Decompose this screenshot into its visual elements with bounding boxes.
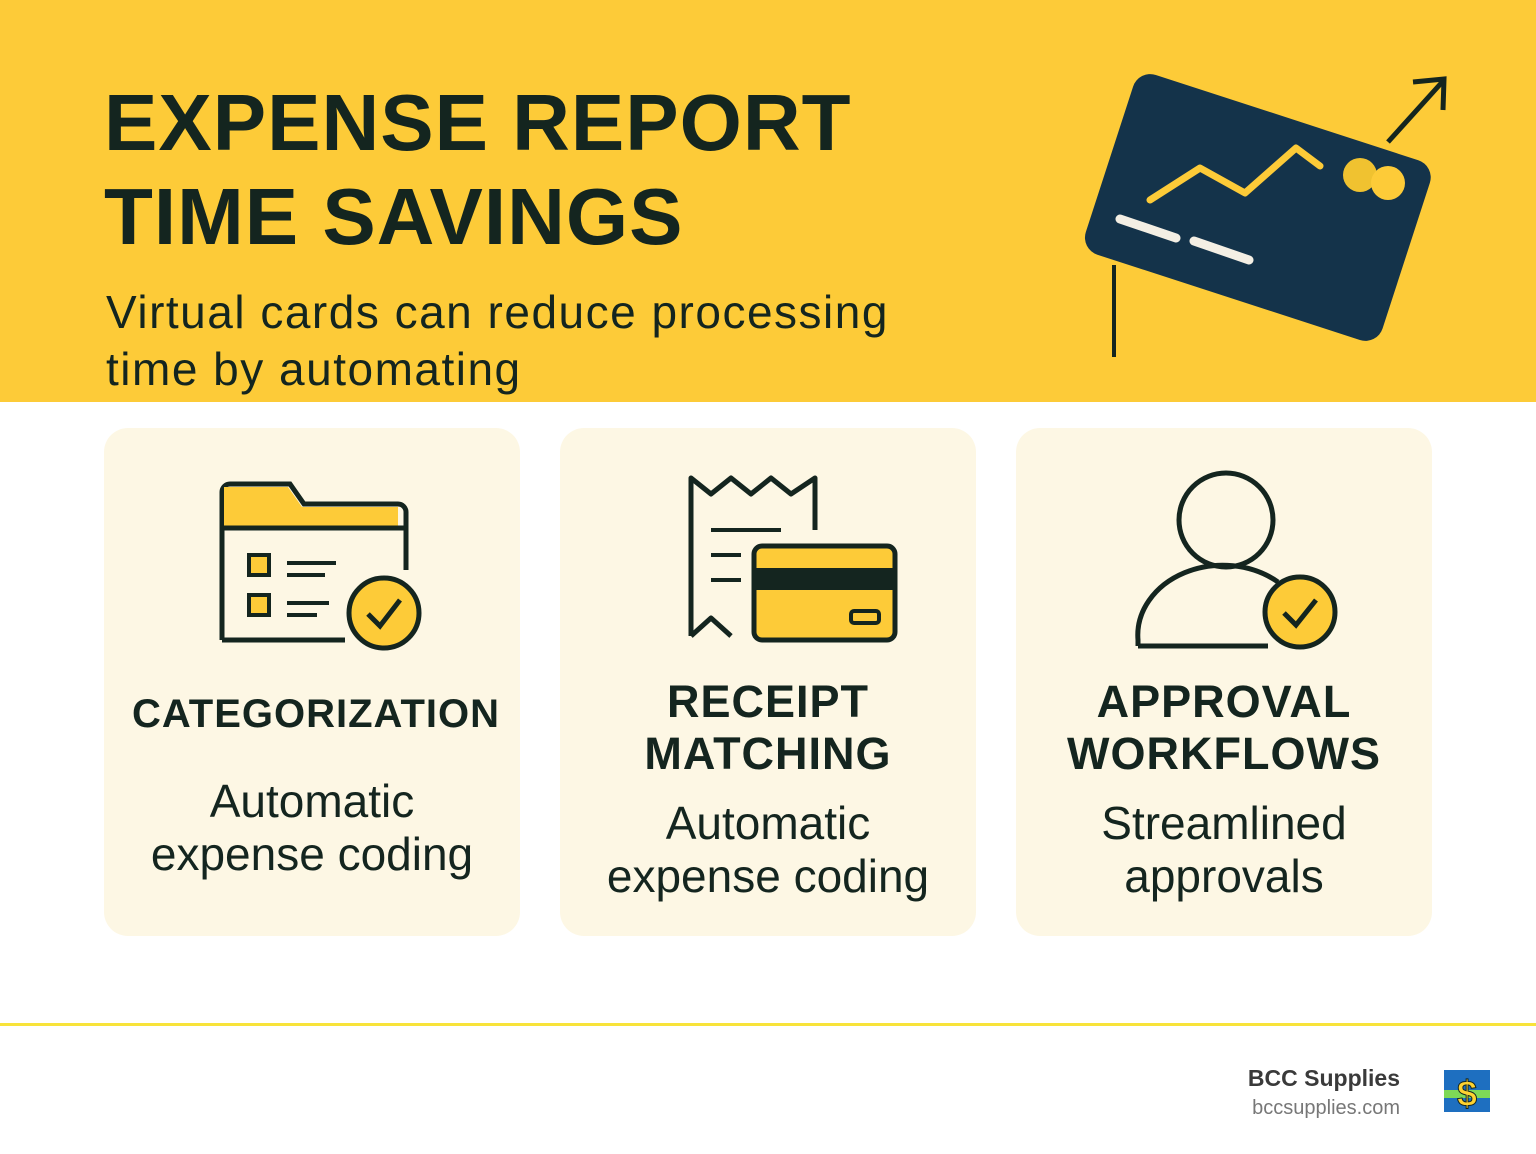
description: expense coding	[607, 850, 929, 902]
heading: CATEGORIZATION	[132, 692, 500, 736]
subtitle: time by automating	[106, 343, 522, 395]
logo	[1444, 1070, 1490, 1114]
title: EXPENSE REPORT	[104, 78, 852, 167]
card: receipt matching	[560, 428, 976, 936]
subtitle: Virtual cards can reduce processing	[106, 286, 889, 338]
footer brand text: BCC Supplies	[1248, 1065, 1400, 1091]
icon: person with check	[1135, 470, 1338, 650]
title	[104, 78, 852, 261]
subtitle	[106, 286, 889, 395]
description: Streamlined	[1101, 797, 1347, 849]
header band	[0, 0, 1536, 402]
illustration: card with trend arrow	[1084, 74, 1447, 357]
icon: folder checklist	[220, 482, 422, 650]
title: TIME SAVINGS	[104, 172, 683, 261]
description	[1101, 797, 1347, 902]
icon: receipt and card	[688, 475, 898, 642]
heading	[1067, 676, 1381, 779]
heading: MATCHING	[644, 728, 892, 779]
card: categorization	[104, 428, 520, 936]
description	[151, 775, 473, 880]
heading	[644, 676, 892, 779]
heading: WORKFLOWS	[1067, 728, 1381, 779]
footer brand text	[1248, 1065, 1400, 1119]
footer divider	[0, 1023, 1536, 1026]
card: approval workflows	[1016, 428, 1432, 936]
description	[607, 797, 929, 902]
description: approvals	[1124, 850, 1324, 902]
description: Automatic	[210, 775, 414, 827]
footer brand text: bccsupplies.com	[1252, 1097, 1400, 1119]
description: expense coding	[151, 828, 473, 880]
description: Automatic	[666, 797, 870, 849]
logo: $	[1457, 1073, 1477, 1114]
heading: RECEIPT	[667, 676, 869, 727]
heading: APPROVAL	[1097, 676, 1351, 727]
